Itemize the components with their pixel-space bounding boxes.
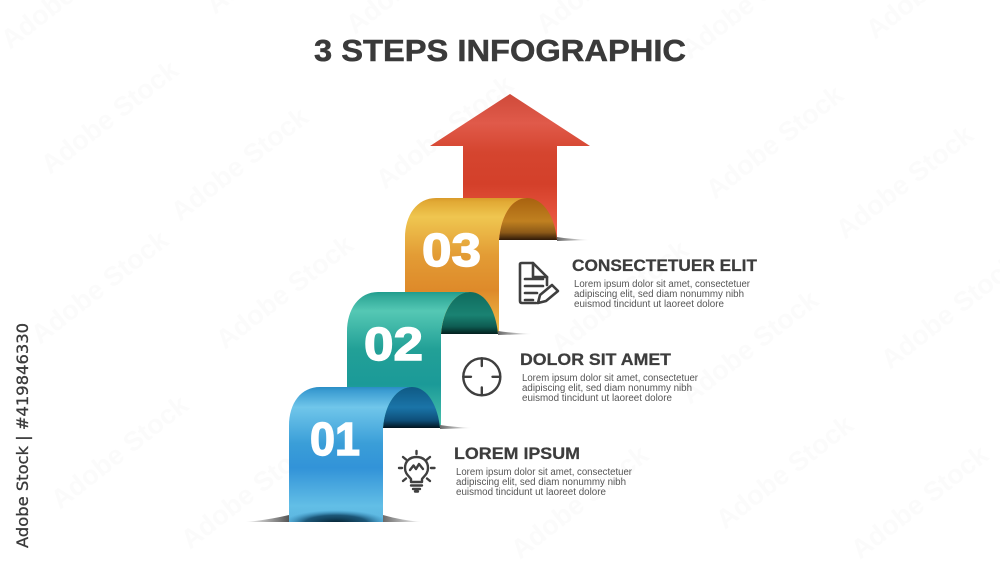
background watermarks: Adobe Stock — [505, 439, 655, 563]
background watermarks: Adobe Stock — [545, 234, 695, 360]
body text: Lorem ipsum dolor sit amet, consectetuer — [574, 279, 751, 290]
number 03: 03 — [422, 224, 481, 276]
body text: Lorem ipsum dolor sit amet, consectetuer — [456, 467, 633, 478]
ribbon 2 front — [347, 292, 470, 428]
background watermarks: Adobe Stock — [165, 101, 315, 227]
background watermarks: Adobe Stock — [710, 409, 860, 535]
heading: consectetuer elit: CONSECTETUER ELIT — [572, 256, 758, 275]
ribbon 3 shadow — [557, 237, 590, 241]
number 02: 02 — [364, 318, 423, 370]
body text: adipiscing elit, sed diam nonummy nibh — [574, 289, 744, 300]
ribbon 2 inner fold — [441, 292, 498, 334]
stock credit vertical text: Adobe Stock | #419846330 — [13, 323, 32, 548]
red up arrow — [430, 94, 590, 240]
background watermarks: Adobe Stock — [45, 389, 195, 515]
step 1 ribbon — [245, 387, 472, 522]
ribbon 3 inner fold — [499, 198, 557, 240]
body text: euismod tincidunt ut laoreet dolore — [522, 393, 673, 404]
ribbon 1 front — [289, 387, 412, 522]
step 2 text — [520, 350, 699, 404]
step 3 text — [572, 256, 758, 310]
heading: lorem ipsum: LOREM IPSUM — [454, 444, 580, 463]
body text: euismod tincidunt ut laoreet dolore — [574, 299, 725, 310]
icon: light bulb — [399, 451, 434, 492]
background watermarks: Adobe Stock — [175, 429, 325, 555]
body text: euismod tincidunt ut laoreet dolore — [456, 487, 607, 498]
body text: Lorem ipsum dolor sit amet, consectetuer — [522, 373, 699, 384]
ribbon 3 front — [405, 198, 527, 334]
background watermarks: Adobe Stock — [25, 224, 175, 350]
number 01: 01 — [310, 413, 360, 465]
icon: document with pencil — [520, 263, 558, 303]
ground shadow left — [245, 515, 289, 522]
background watermarks: Adobe Stock — [700, 79, 850, 205]
icon: crosshair target — [463, 358, 500, 395]
body text — [574, 279, 751, 310]
heading: dolor sit amet: DOLOR SIT AMET — [520, 350, 672, 369]
step 3 ribbon — [405, 198, 590, 334]
body text: adipiscing elit, sed diam nonummy nibh — [456, 477, 626, 488]
ribbon 1 inner fold — [383, 387, 440, 428]
body text — [522, 373, 699, 404]
step 2 ribbon — [347, 292, 532, 428]
background watermarks: Adobe Stock — [210, 229, 360, 355]
background watermarks: Adobe Stock — [845, 439, 995, 563]
ribbon 1 shadows — [440, 425, 472, 429]
background watermarks: Adobe Stock — [35, 54, 185, 180]
background watermarks: Adobe Stock — [675, 284, 825, 410]
step 1 text — [454, 444, 633, 498]
body text: adipiscing elit, sed diam nonummy nibh — [522, 383, 692, 394]
title: 3 STEPS INFOGRAPHIC — [314, 33, 686, 68]
background watermarks: Adobe Stock — [830, 119, 980, 245]
body text — [456, 467, 633, 498]
background watermarks: Adobe Stock — [370, 69, 520, 195]
ribbon 1 base shading — [289, 509, 383, 522]
ground shadow right — [383, 515, 422, 522]
ribbon 2 shadow — [498, 331, 532, 335]
